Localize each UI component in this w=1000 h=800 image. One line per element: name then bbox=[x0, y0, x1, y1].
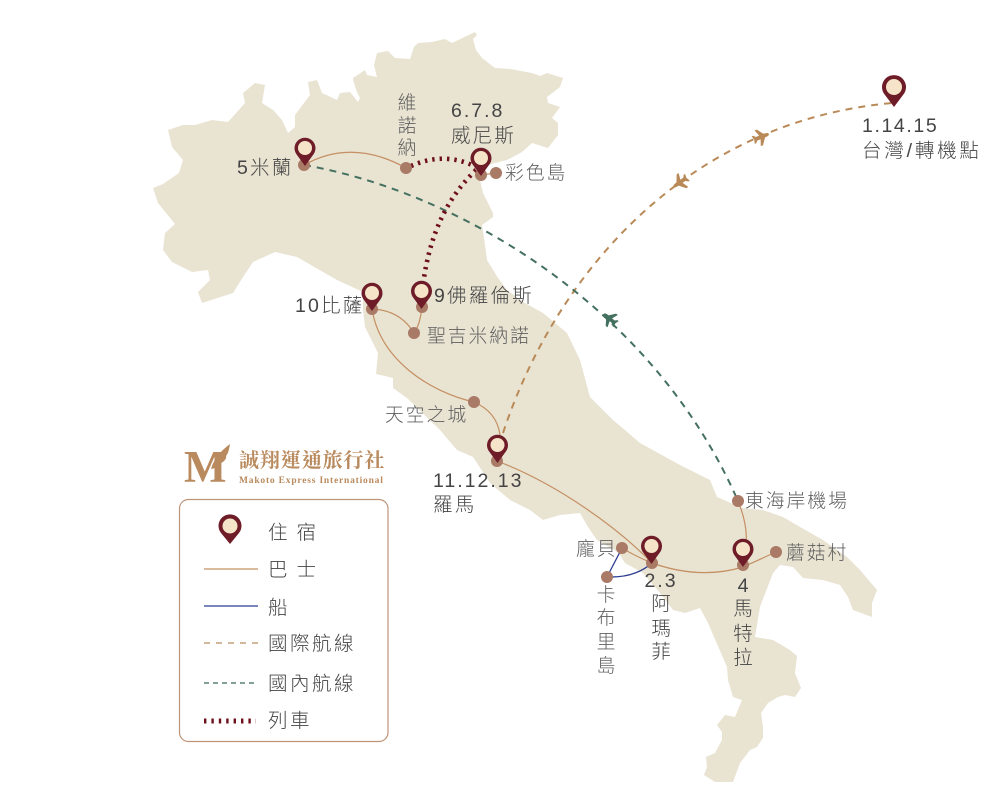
legend: train bbox=[204, 710, 312, 732]
label: Venice: 威尼斯 bbox=[451, 125, 516, 147]
label: San Gimignano: 聖吉米納諾 bbox=[427, 325, 531, 346]
label: Alberobello: 蘑菇村 bbox=[786, 542, 848, 563]
label: Taiwan: 1.14.15 bbox=[862, 115, 938, 137]
label: Amalfi: 瑪 bbox=[651, 618, 671, 640]
label: Matera: 馬 bbox=[733, 598, 753, 620]
label: Venice: 6.7.8 bbox=[451, 100, 504, 122]
routes: train bbox=[411, 159, 476, 285]
stop dots bbox=[298, 159, 782, 583]
legend: lodging: 住宿 bbox=[268, 522, 325, 544]
label: Milan: 5米蘭 bbox=[237, 157, 293, 179]
logo English name: Makoto Express International bbox=[239, 476, 384, 486]
legend: boat bbox=[204, 597, 290, 619]
map of Italy bbox=[153, 32, 877, 782]
icon: plane returning to Italy bbox=[669, 170, 692, 194]
label: Pompeii: 龐貝 bbox=[576, 538, 618, 559]
label: Taiwan: 台灣/轉機點 bbox=[862, 140, 982, 162]
logo bbox=[184, 442, 385, 492]
routes: bus bbox=[304, 152, 776, 573]
label: Verona: 納 bbox=[398, 137, 416, 158]
legend: train: 列車 bbox=[268, 710, 312, 732]
legend: boat: 船 bbox=[268, 597, 290, 619]
icon: logo M with wing: M bbox=[184, 442, 226, 492]
logo name: 誠翔運通旅行社 bbox=[239, 449, 385, 472]
panel: legend bbox=[180, 500, 388, 742]
label: Amalfi: 阿 bbox=[651, 593, 671, 615]
pin: Florence bbox=[411, 281, 432, 309]
label: Capri: 卡 bbox=[597, 584, 615, 605]
legend: lodging bbox=[218, 514, 325, 544]
label: Pisa: 10比薩 bbox=[295, 295, 364, 317]
route: international flight bbox=[503, 103, 892, 433]
label: Verona: 維 bbox=[398, 92, 416, 113]
pin: Rome bbox=[487, 435, 508, 463]
label: Matera: 拉 bbox=[733, 647, 753, 669]
label: Burano: 彩色島 bbox=[505, 162, 567, 183]
label: Capri: 島 bbox=[597, 655, 615, 676]
label: Amalfi: 菲 bbox=[651, 641, 671, 663]
label: Matera: 特 bbox=[733, 623, 753, 645]
pin: Pisa bbox=[362, 283, 382, 311]
label: Capri: 布 bbox=[597, 607, 615, 628]
legend: bus: 巴士 bbox=[268, 559, 325, 581]
label: east coast airport: 東海岸機場 bbox=[745, 490, 849, 511]
icon: plane departing Italy bbox=[750, 126, 772, 148]
route: domestic flight bbox=[304, 165, 738, 501]
legend: bus bbox=[204, 559, 325, 581]
pin: Matera bbox=[732, 539, 754, 567]
pin: Taiwan bbox=[882, 75, 906, 107]
label: Florence: 9佛羅倫斯 bbox=[434, 285, 534, 307]
label: Capri: 里 bbox=[597, 631, 615, 652]
legend: international flight: 國際航線 bbox=[268, 633, 356, 655]
label: Amalfi: 2.3 bbox=[644, 570, 678, 592]
pin: Amalfi bbox=[641, 536, 662, 564]
label: Matera: 4 bbox=[738, 575, 749, 597]
legend: domestic flight: 國內航線 bbox=[268, 673, 356, 695]
pin: Venice bbox=[470, 148, 492, 176]
label: Civita: 天空之城 bbox=[385, 404, 468, 425]
label: Verona: 諾 bbox=[398, 115, 416, 136]
label: Rome: 羅馬 bbox=[433, 494, 476, 516]
pin: Milan bbox=[294, 138, 316, 166]
routes: boat bbox=[607, 548, 652, 577]
icon: domestic plane bbox=[599, 308, 621, 330]
label: Rome: 11.12.13 bbox=[433, 470, 523, 492]
